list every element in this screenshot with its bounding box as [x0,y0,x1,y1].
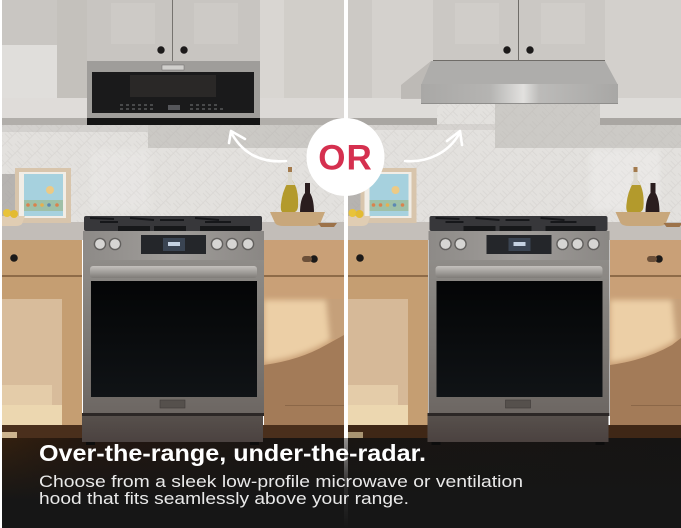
panel: microwave option [2,0,344,445]
OR badge [306,118,384,196]
upper cabinets [348,0,681,125]
range [82,216,264,445]
arrow: to hood [405,131,462,161]
countertop [348,222,681,240]
icon: cabinet knobs [157,46,188,54]
toe kick [2,425,344,438]
microwave [87,61,260,125]
icon: cabinet knobs [503,46,534,54]
wood cabinets [348,240,681,425]
backsplash [348,100,681,225]
icon: cabinet pulls [356,254,663,263]
under-cabinet shadow [2,124,344,210]
picture and bottles [348,167,681,227]
ventilation hood [421,61,618,104]
countertop [2,222,344,240]
backsplash [2,120,344,225]
panel: ventilation hood option [348,0,681,445]
range [428,216,610,445]
caption body: hood that fits seamlessly above your range. [39,489,409,508]
OR badge: OR [318,138,373,178]
picture and bottles [2,167,337,227]
divider [344,0,348,528]
left margin [0,0,2,528]
floor [2,438,681,528]
caption body: Choose from a sleek low-profile microwave or ventilation [39,472,523,491]
arrow: to microwave [229,131,286,161]
upper cabinets [2,0,344,125]
toe kick [348,425,681,438]
under-hood shadow [348,104,681,210]
caption heading: Over-the-range, under-the-radar. [39,440,426,466]
icon: cabinet pulls [10,254,318,263]
wood cabinets [2,240,344,425]
